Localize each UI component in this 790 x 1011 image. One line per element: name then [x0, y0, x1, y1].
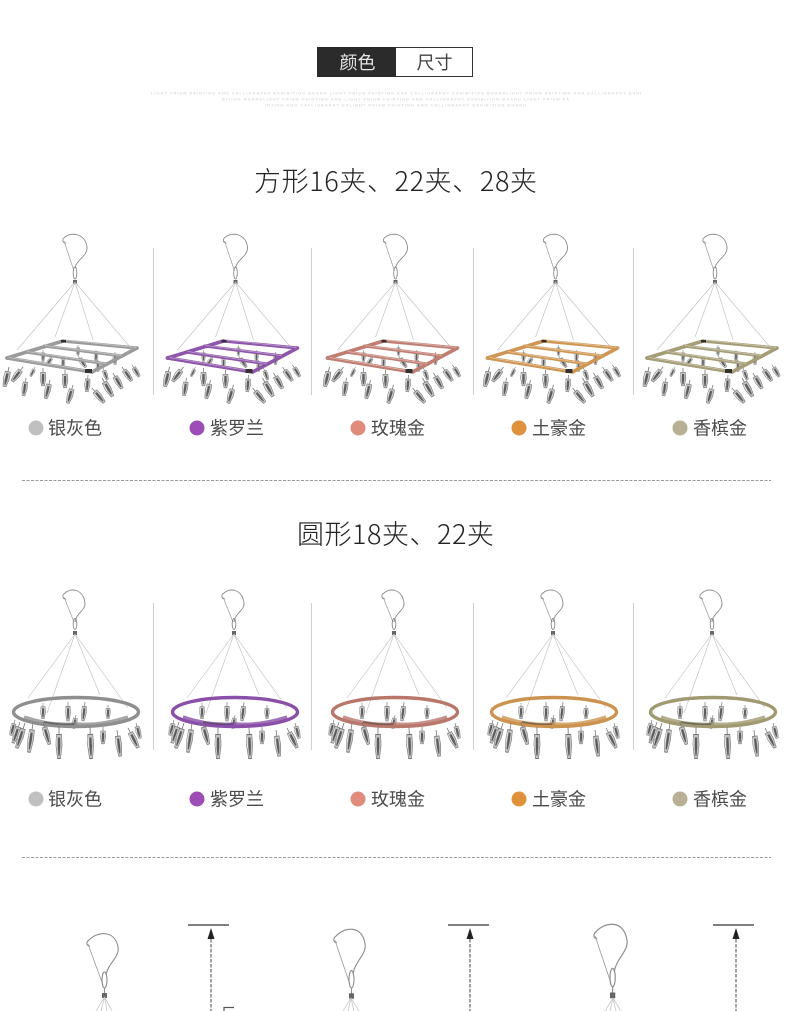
square hanger: champagne gold: [642, 234, 781, 404]
colour legend: square row: 土豪金: [532, 414, 586, 440]
size hanger 1 with height dimension: [87, 925, 234, 1011]
square hanger: violet: [162, 234, 302, 404]
colour legend: square row: 香槟金: [693, 414, 747, 440]
heading: square hangers: 方形16夹、22夹、28夹: [254, 160, 537, 199]
square hanger: silver: [2, 234, 141, 404]
faint English caption: BITION BOARDLIGHT PRISM PAINTING AND LIGHT PRISM PAINTING AND CALLIGRAPHY EXHIBITION BOARD LIGHT PRISM PA: [222, 96, 569, 102]
size hanger 3 with height dimension: [594, 924, 754, 1011]
round hanger: rose gold: [327, 590, 462, 759]
faint English caption: LIGHT PRISM PAINTING AND CALLIGRAPHY EXHIBITION BOARD LIGHT PRISM PAINTING AND CALLIGRAPHY EXHIBITION BOARDLIGHT PRISM PAINTING AND CALLIGRAPHY EXHI: [151, 90, 641, 96]
colour legend: square row: 玫瑰金: [371, 414, 425, 440]
colour legend: square row: 银灰色: [48, 414, 102, 440]
colour legend: round row: 玫瑰金: [371, 786, 425, 812]
colour legend: round row: [28, 786, 747, 812]
colour legend: round row: 银灰色: [48, 786, 102, 812]
round hanger: violet: [167, 590, 302, 759]
colour legend: round row: 紫罗兰: [210, 786, 264, 812]
heading: round hangers: 圆形18夹、22夹: [297, 513, 494, 552]
round hanger: tycoon gold: [486, 590, 621, 759]
size hanger 2 with height dimension: [334, 925, 489, 1011]
square hanger: tycoon gold: [482, 234, 622, 404]
round hanger: silver: [8, 590, 143, 759]
colour legend: square row: [28, 414, 747, 440]
round hanger: champagne gold: [645, 590, 780, 759]
tab switch: colour / size: 颜色: [340, 49, 376, 75]
faint English caption: INTING AND CALLIGRAPHY EXLIGHT PRISM PAINTING AND CALLIGRAPHY EXHIBITION BOARD: [265, 102, 526, 108]
square hanger: rose gold: [322, 234, 462, 404]
colour legend: square row: 紫罗兰: [210, 414, 264, 440]
colour legend: round row: 土豪金: [532, 786, 586, 812]
faint English caption: [151, 90, 641, 108]
tab switch: colour / size: 尺寸: [416, 49, 452, 75]
tab switch: colour / size: [317, 47, 472, 77]
colour legend: round row: 香槟金: [693, 786, 747, 812]
